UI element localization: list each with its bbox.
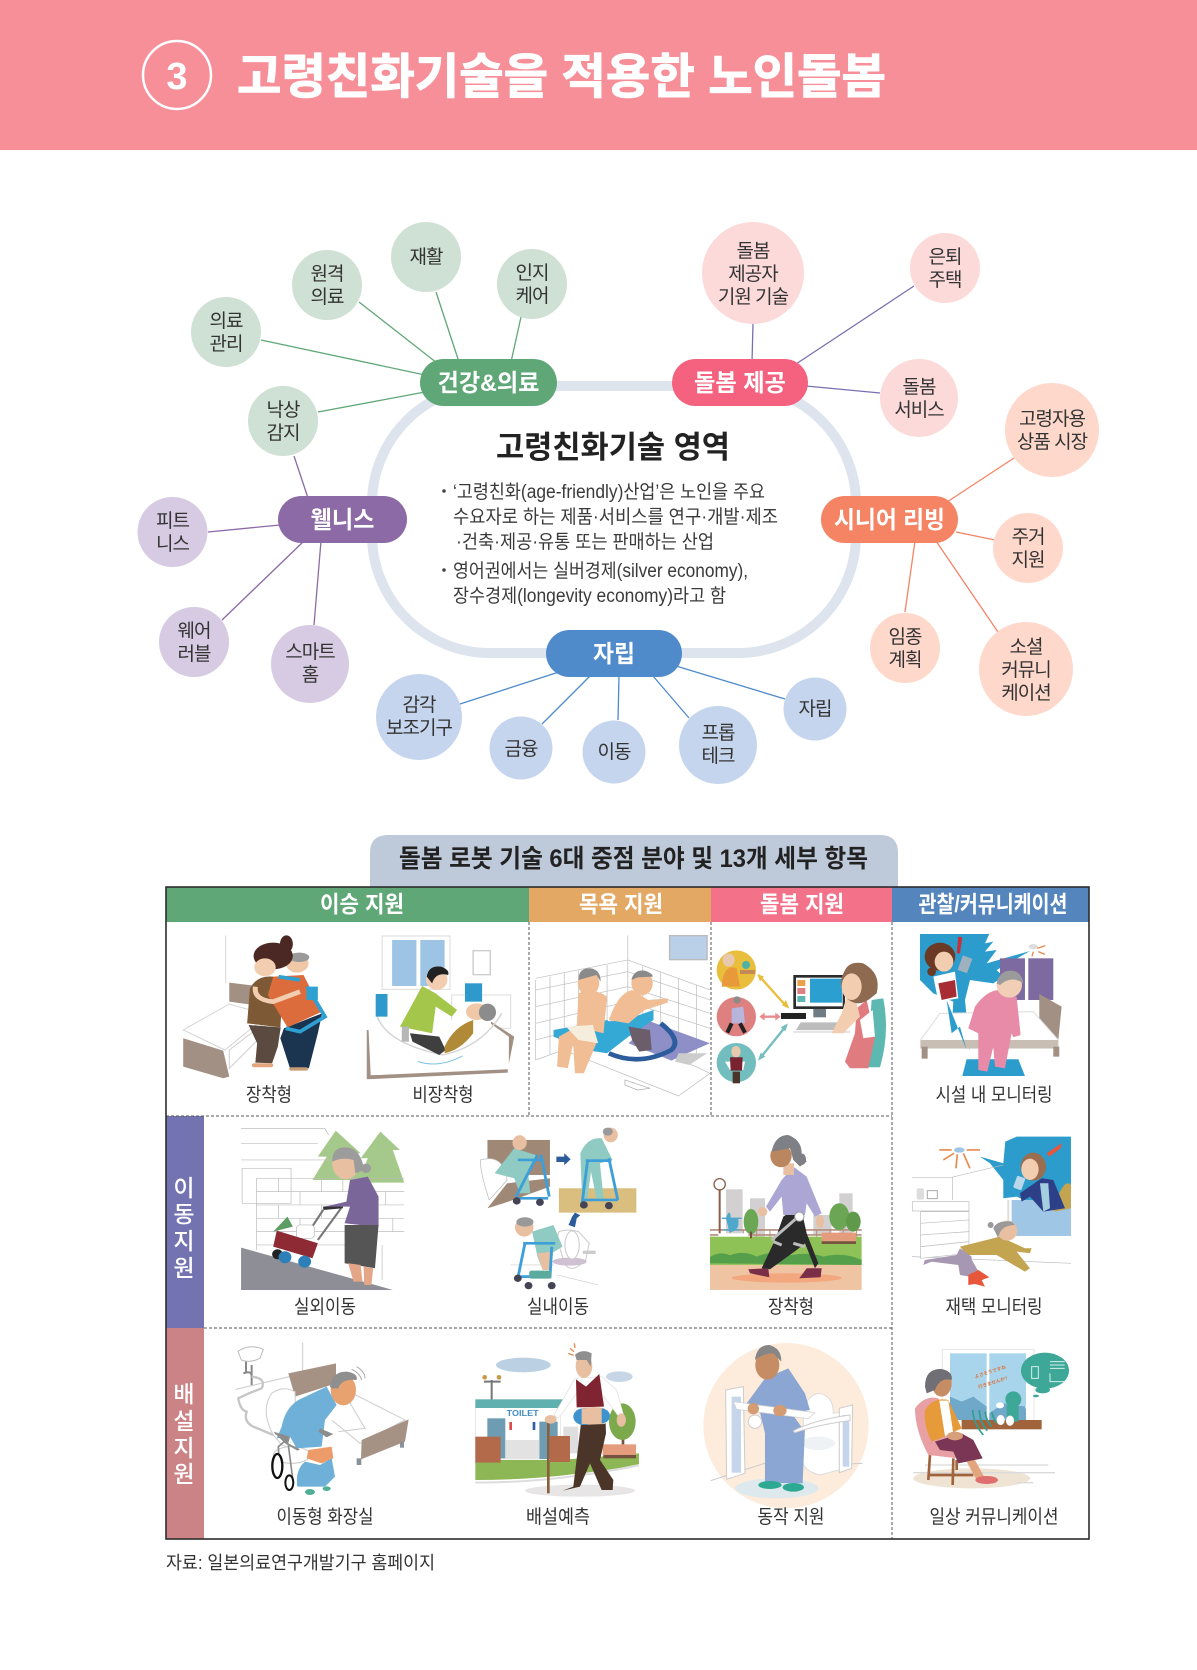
bubble: 임종 계획: 계획 xyxy=(889,649,921,671)
bubble: 소셜 커뮤니 케이션: 케이션 xyxy=(1001,682,1051,704)
section number badge: 3 xyxy=(166,56,188,98)
table title tab: 돌봄 로봇 기술 6대 중점 분야 및 13개 세부 항목 xyxy=(399,845,868,873)
central ring xyxy=(372,386,856,653)
header banner xyxy=(0,0,1197,150)
item label: 동작 지원: 동작 지원 xyxy=(758,1506,824,1528)
bubble: 의료 관리 xyxy=(191,297,261,367)
bubble: 프롭 테크 xyxy=(679,706,757,784)
item label: 비장착형: 비장착형 xyxy=(412,1084,474,1106)
illustration: mobile toilet xyxy=(236,1343,409,1495)
bubble: 의료 관리: 관리 xyxy=(210,333,242,355)
connectors: senior living xyxy=(905,458,1014,632)
bubble: 의료 관리: 의료 xyxy=(210,310,243,332)
bubble: 돌봄 서비스: 서비스 xyxy=(894,399,944,421)
illustration: non-wearable transfer assist xyxy=(367,936,514,1079)
bubble: 원격 의료: 원격 xyxy=(311,263,343,285)
bubble: 스마트 홈 xyxy=(271,625,349,703)
description: 영어권에서는 실버경제(silver economy), xyxy=(453,560,748,582)
row header: 이동 지원: 지 xyxy=(173,1228,195,1254)
category pill: 건강&의료 xyxy=(420,359,557,406)
description xyxy=(442,481,778,607)
bubble: 인지 케어: 인지 xyxy=(516,262,548,284)
row header: 이동 지원: 이 xyxy=(173,1175,195,1201)
bubble: 돌봄 제공자 기원 기술: 기원 기술 xyxy=(718,286,789,308)
bubble: 주거 지원: 지원 xyxy=(1012,549,1044,571)
description: ‘고령친화(age-friendly)산업’은 노인을 주요 xyxy=(453,481,765,503)
bubble: 스마트 홈: 스마트 xyxy=(285,641,335,663)
connectors: health and medical xyxy=(261,292,521,412)
row header: 배설 지원: 원 xyxy=(173,1461,195,1487)
item label: 시설 내 모니터링: 시설 내 모니터링 xyxy=(936,1084,1052,1106)
item label: 실외이동: 실외이동 xyxy=(294,1296,356,1318)
illustration: wearable walking assist xyxy=(710,1135,862,1290)
bubble: 웨어 러블 xyxy=(159,607,229,677)
description: ·건축·제공·유통 또는 판매하는 산업 xyxy=(456,531,714,553)
tile wall xyxy=(536,935,710,1060)
column header: 이승 지원: 이승 지원 xyxy=(320,891,404,917)
category pill: 자립: 자립 xyxy=(593,641,635,668)
title: 고령친화기술을 적용한 노인돌봄 xyxy=(237,51,886,104)
row header: 이동 지원: 원 xyxy=(173,1255,195,1281)
connectors: wellness xyxy=(208,456,321,625)
illustration: daily communication xyxy=(913,1349,1069,1488)
bubble: 돌봄 제공자 기원 기술: 돌봄 xyxy=(737,241,770,262)
bubble: 이동: 이동 xyxy=(598,741,631,763)
bubble: 은퇴 주택: 주택 xyxy=(929,269,961,291)
illustration: excretion prediction: TOILET xyxy=(507,1408,539,1418)
section number badge xyxy=(143,41,211,109)
illustration: excretion prediction xyxy=(475,1343,639,1497)
column header: 목욕 지원 xyxy=(529,887,711,922)
row header: 이동 지원 xyxy=(166,1116,204,1328)
bubble: 피트 니스: 니스 xyxy=(156,533,189,555)
column header: 관찰/커뮤니케이션: 관찰/커뮤니케이션 xyxy=(918,891,1068,917)
bubble: 은퇴 주택: 은퇴 xyxy=(929,246,961,268)
bubble: 임종 계획: 임종 xyxy=(889,626,922,648)
bubble: 소셜 커뮤니 케이션: 소셜 xyxy=(1010,636,1042,658)
bubble: 프롭 테크: 테크 xyxy=(702,745,735,767)
bubble: 돌봄 서비스 xyxy=(880,359,958,437)
bubble: 감각 보조기구: 감각 xyxy=(403,694,436,716)
bubble: 낙상 감지: 낙상 xyxy=(267,399,300,421)
bubble: 고령자용 상품 시장 xyxy=(1005,383,1099,477)
illustration: daily communication: よさそうですね xyxy=(974,1363,1007,1380)
bubble: 이동 xyxy=(582,720,646,784)
bubble: 은퇴 주택 xyxy=(910,233,980,303)
bubble: 소셜 커뮤니 케이션 xyxy=(979,622,1073,716)
illustration: home monitoring xyxy=(912,1137,1071,1287)
category pill: 시니어 리빙: 시니어 리빙 xyxy=(834,507,945,534)
illustration: wearable transfer assist xyxy=(183,935,325,1078)
central heading: 고령친화기술 영역 xyxy=(496,430,730,465)
row header: 배설 지원 xyxy=(166,1328,204,1539)
bubble: 재활: 재활 xyxy=(410,246,443,268)
central text block xyxy=(442,430,778,607)
bubble: 웨어 러블: 러블 xyxy=(178,643,211,665)
table title tab xyxy=(370,835,898,887)
item label: 실내이동: 실내이동 xyxy=(527,1296,589,1318)
illustration: indoor mobility xyxy=(480,1128,636,1289)
bubble: 돌봄 서비스: 돌봄 xyxy=(903,377,936,398)
row header: 배설 지원: 배 xyxy=(173,1381,195,1407)
column header: 관찰/커뮤니케이션 xyxy=(892,887,1089,922)
bubble: 낙상 감지 xyxy=(248,386,318,456)
item label: 배설예측: 배설예측 xyxy=(526,1506,590,1528)
item label: 이동형 화장실: 이동형 화장실 xyxy=(276,1506,374,1528)
bubble: 주거 지원 xyxy=(993,513,1063,583)
bubble: 금융 xyxy=(490,716,552,780)
connectors: independence xyxy=(460,666,785,724)
column header: 목욕 지원: 목욕 지원 xyxy=(579,891,663,917)
bubble: 자립 xyxy=(784,678,846,740)
category pill: 자립 xyxy=(546,630,682,677)
bubble: 고령자용 상품 시장: 고령자용 xyxy=(1019,408,1085,430)
row header: 배설 지원: 지 xyxy=(173,1435,195,1461)
mind map: age-friendly technology areas xyxy=(138,222,1099,784)
bubble: 고령자용 상품 시장: 상품 시장 xyxy=(1017,431,1088,453)
connectors: care provision xyxy=(752,286,914,393)
item label: 장착형: 장착형 xyxy=(246,1084,292,1106)
illustration: motion support xyxy=(703,1343,869,1508)
category pill: 돌봄 제공: 돌봄 제공 xyxy=(694,370,786,397)
row header: 배설 지원: 설 xyxy=(173,1408,195,1434)
bubble: 스마트 홈: 홈 xyxy=(302,664,319,686)
column header: 이승 지원 xyxy=(166,887,529,922)
bubble: 웨어 러블: 웨어 xyxy=(178,620,210,642)
row header: 이동 지원: 동 xyxy=(173,1201,195,1227)
bubble: 금융: 금융 xyxy=(505,739,538,760)
column header: 돌봄 지원 xyxy=(711,887,892,922)
illustration: daily communication: 行きませんか? xyxy=(977,1374,1009,1391)
category pill: 시니어 리빙 xyxy=(821,496,958,543)
item label: 장착형 walking: 장착형 xyxy=(768,1296,814,1318)
bubble: 원격 의료: 의료 xyxy=(311,286,344,308)
illustration: outdoor mobility xyxy=(241,1129,404,1290)
source note: 자료: 일본의료연구개발기구 홈페이지 xyxy=(166,1553,435,1573)
item label: 일상 커뮤니케이션: 일상 커뮤니케이션 xyxy=(930,1506,1058,1528)
bubble: 자립: 자립 xyxy=(799,698,831,720)
category pill: 웰니스: 웰니스 xyxy=(310,507,374,534)
description: 장수경제(longevity economy)라고 함 xyxy=(453,585,726,607)
bubble: 낙상 감지: 감지 xyxy=(267,422,299,444)
illustration: facility monitoring xyxy=(920,934,1062,1076)
illustration: bathing assist xyxy=(536,935,710,1096)
illustration: remote care monitoring xyxy=(717,950,886,1083)
item label: 재택 모니터링: 재택 모니터링 xyxy=(946,1296,1042,1318)
bubble: 감각 보조기구 xyxy=(376,674,462,760)
bubble: 주거 지원: 주거 xyxy=(1012,526,1044,548)
bubble: 인지 케어 xyxy=(497,249,567,319)
bubble: 피트 니스 xyxy=(138,497,208,567)
bubble: 재활 xyxy=(391,222,461,292)
category pill: 돌봄 제공 xyxy=(672,359,808,406)
bubble: 감각 보조기구: 보조기구 xyxy=(386,717,452,739)
bubble: 임종 계획 xyxy=(870,613,940,683)
bubble: 돌봄 제공자 기원 기술 xyxy=(702,222,804,324)
bubble: 프롭 테크: 프롭 xyxy=(702,723,735,744)
bubble: 인지 케어: 케어 xyxy=(516,285,548,307)
bubble: 돌봄 제공자 기원 기술: 제공자 xyxy=(728,263,778,285)
category pill: 웰니스 xyxy=(278,496,407,543)
column header: 돌봄 지원: 돌봄 지원 xyxy=(760,891,844,917)
care robot table xyxy=(166,887,1089,1539)
bubble: 원격 의료 xyxy=(292,250,362,320)
category pill: 건강&의료: 건강&의료 xyxy=(438,370,540,397)
bubble: 소셜 커뮤니 케이션: 커뮤니 xyxy=(1001,659,1051,681)
description: 수요자로 하는 제품·서비스를 연구·개발·제조 xyxy=(453,506,778,528)
bubble: 피트 니스: 피트 xyxy=(156,510,189,532)
